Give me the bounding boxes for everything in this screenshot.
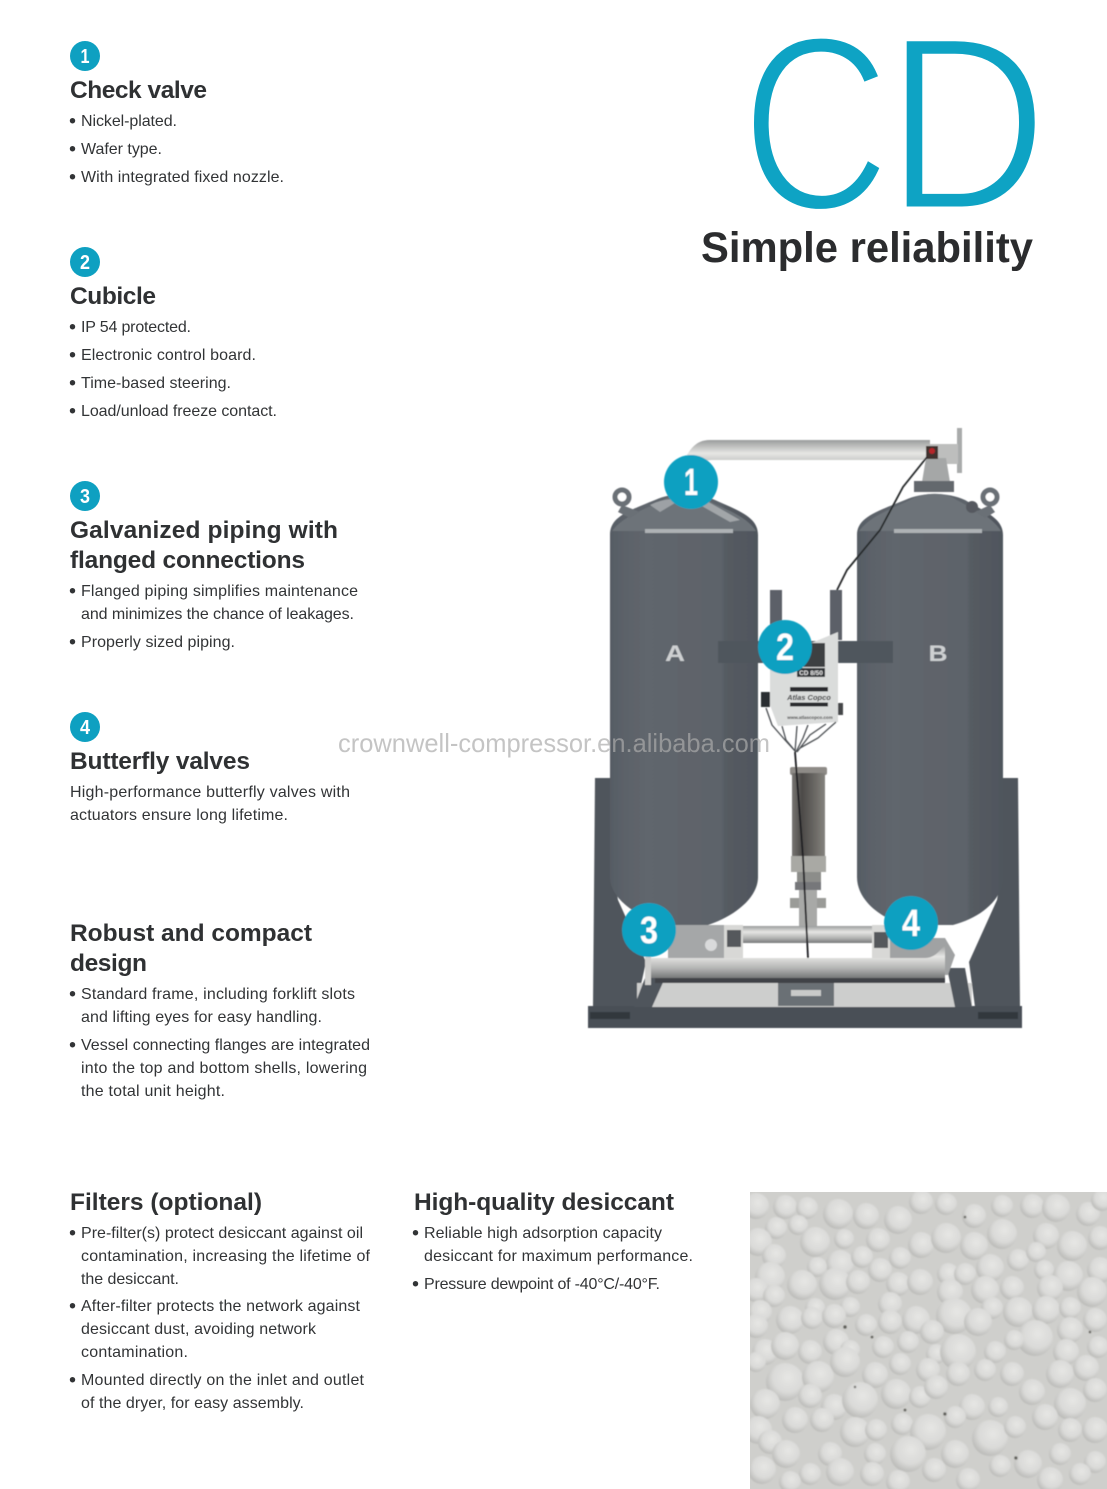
bullet list: galvanized piping: Properly sized piping. [81, 634, 235, 651]
bullet list: filters [69, 1222, 371, 1412]
bullet list: filters: Mounted directly on the inlet and outlet [81, 1372, 365, 1389]
bullet list: robust and compact design: • [69, 1034, 76, 1056]
control wires [766, 708, 836, 752]
section: butterfly valves [70, 712, 350, 824]
bullet list: desiccant: Pressure dewpoint of -40°C/-40°F. [424, 1276, 660, 1293]
bullet list: filters: Pre-filter(s) protect desiccant against oil [81, 1225, 363, 1242]
heading: robust and compact design: Robust and compact [70, 920, 312, 947]
bullet list: cubicle: Load/unload freeze contact. [81, 403, 277, 420]
logo text: Atlas Copco [786, 693, 831, 702]
badge 2 [70, 247, 100, 277]
badge callout 3: 3 [640, 910, 658, 952]
section: galvanized piping [69, 481, 358, 654]
bullet list: filters: of the dryer, for easy assembly. [81, 1395, 304, 1412]
bullet list: robust and compact design: the total unit height. [81, 1083, 225, 1100]
watermark: crownwell-compressor.en.alibaba.com [338, 728, 770, 758]
heading: galvanized piping: flanged connections [70, 547, 305, 574]
bullet list: desiccant: Reliable high adsorption capacity [424, 1225, 662, 1242]
section: cubicle [69, 247, 277, 422]
badge 4 [70, 712, 100, 742]
badge 1 [70, 41, 100, 71]
bullet list: desiccant [412, 1222, 693, 1296]
bullet list: check valve [69, 110, 284, 188]
bullet list: filters: contamination, increasing the lifetime of [81, 1248, 371, 1265]
badge callout 3 [622, 903, 676, 957]
section: check valve [69, 41, 284, 188]
valves [668, 925, 955, 975]
bullet list: cubicle: • [69, 316, 76, 338]
badge callout 2 [758, 620, 812, 674]
badge callout 1: 1 [684, 462, 698, 504]
top pipe with flange [680, 428, 962, 492]
bullet list: cubicle: IP 54 protected. [81, 319, 191, 336]
bullet list: cubicle: • [69, 372, 76, 394]
bullet list: robust and compact design: Vessel connecting flanges are integrated [81, 1037, 370, 1054]
text: butterfly valves [70, 784, 350, 824]
control box [761, 632, 843, 726]
tank A [610, 490, 758, 925]
tank label B: B [928, 641, 948, 666]
tank B [857, 490, 1003, 925]
section: robust and compact design [69, 920, 370, 1100]
heading: filters: Filters (optional) [70, 1189, 262, 1216]
bullet list: check valve: With integrated fixed nozzle. [81, 169, 284, 186]
text: butterfly valves: actuators ensure long lifetime. [70, 807, 288, 824]
badge 4: 4 [80, 717, 91, 739]
bullet list: desiccant: • [412, 1222, 419, 1244]
bullet list: filters: contamination. [81, 1344, 188, 1361]
bullet list: check valve: • [69, 110, 76, 132]
badge callout 4: 4 [902, 903, 920, 945]
sensor cable [837, 457, 927, 590]
bullet list: desiccant: • [412, 1274, 419, 1296]
frame [588, 778, 1022, 1028]
badge 1: 1 [80, 46, 90, 68]
badge callout 4 [884, 896, 938, 950]
badge callout 1 [664, 455, 718, 509]
lower pipe [645, 945, 945, 985]
bullet list: filters: • [69, 1296, 76, 1318]
bullet list: cubicle: • [69, 400, 76, 422]
bullet list: check valve: Nickel-plated. [81, 113, 177, 130]
title: CD [741, 0, 1048, 262]
badge 3 [70, 481, 100, 511]
bullet list: robust and compact design: into the top and bottom shells, lowering [81, 1060, 367, 1077]
heading: galvanized piping [70, 517, 338, 574]
badge 2: 2 [80, 252, 90, 274]
middle pipe [722, 926, 887, 943]
connecting bar and stubs [718, 590, 893, 663]
bullet list: filters: desiccant dust, avoiding network [81, 1321, 317, 1338]
heading: robust and compact design: design [70, 950, 147, 977]
bullet list: filters: After-filter protects the network against [81, 1298, 361, 1315]
heading: butterfly valves: Butterfly valves [70, 748, 250, 775]
badge callout 2: 2 [776, 627, 794, 669]
heading: high-quality desiccant: High-quality desiccant [414, 1189, 674, 1216]
central filter [790, 767, 827, 928]
bullet list: galvanized piping: • [69, 632, 76, 654]
bullet list: filters: • [69, 1222, 76, 1244]
section: high-quality desiccant [412, 1189, 693, 1296]
cable through filter [795, 752, 808, 958]
badge 3: 3 [80, 486, 90, 508]
bullet list: cubicle: Electronic control board. [81, 347, 256, 364]
heading: galvanized piping: Galvanized piping with [70, 517, 338, 544]
bullet list: galvanized piping [69, 580, 358, 654]
bullet list: galvanized piping: and minimizes the chance of leakages. [81, 606, 354, 623]
bullet list: cubicle: • [69, 344, 76, 366]
display model label: CD 8/50 [799, 670, 823, 677]
bullet list: check valve: Wafer type. [81, 141, 162, 158]
photo: desiccant beads [743, 1189, 1107, 1489]
heading: cubicle: Cubicle [70, 283, 156, 310]
bullet list: robust and compact design: Standard frame, including forklift slots [81, 986, 355, 1003]
bullet list: filters: • [69, 1370, 76, 1392]
subtitle: simple reliability: Simple reliability [701, 224, 1033, 272]
bullet list: robust and compact design [69, 984, 370, 1100]
web address: www.atlascopco.com [786, 715, 833, 720]
bullet list: cubicle: Time-based steering. [81, 375, 231, 392]
bullet list: check valve: • [69, 166, 76, 188]
text: butterfly valves: High-performance butterfly valves with [70, 784, 350, 801]
tank label A: A [665, 641, 685, 666]
bullet list: desiccant: desiccant for maximum performance. [424, 1248, 693, 1265]
dryer illustration [588, 428, 1022, 1028]
bullet list: cubicle [69, 316, 277, 422]
bullet list: check valve: • [69, 138, 76, 160]
bullet list: galvanized piping: Flanged piping simplifies maintenance [81, 583, 358, 600]
bullet list: galvanized piping: • [69, 580, 76, 602]
heading: check valve: Check valve [70, 77, 207, 104]
bullet list: filters: the desiccant. [81, 1271, 179, 1288]
section: filters [69, 1189, 371, 1412]
heading: robust and compact design [70, 920, 312, 977]
bullet list: robust and compact design: and lifting eyes for easy handling. [81, 1009, 322, 1026]
bullet list: robust and compact design: • [69, 984, 76, 1006]
